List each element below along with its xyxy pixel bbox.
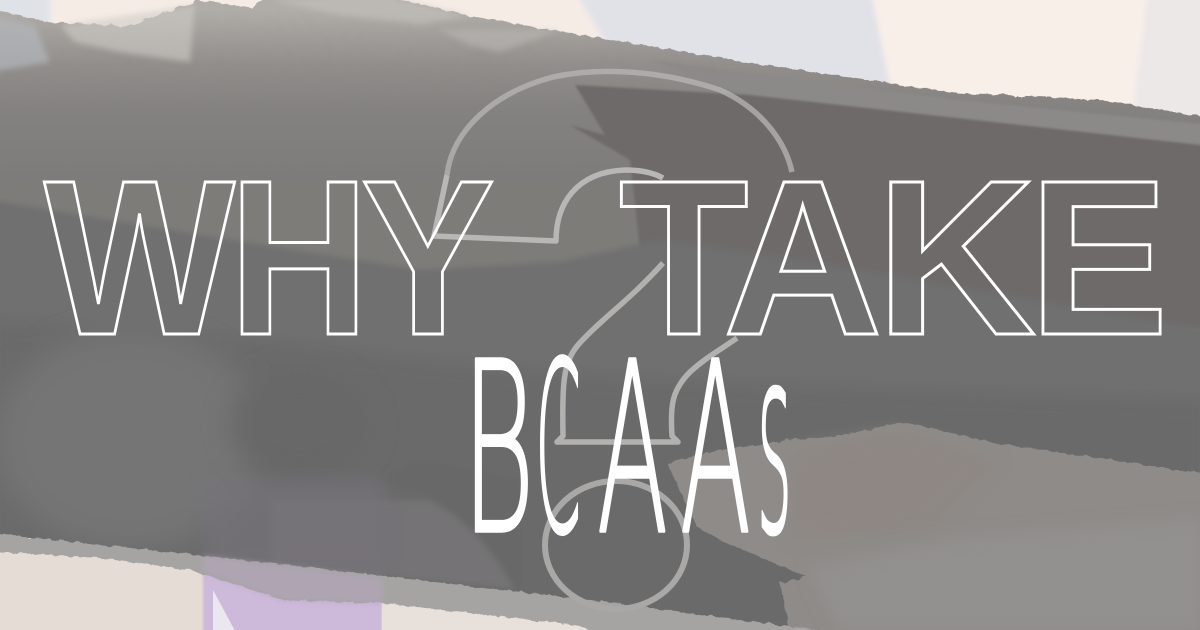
title: BCAAs: A — [680, 312, 751, 587]
band: darker lower section — [0, 202, 1200, 538]
question mark: left foot and inner hook — [434, 170, 663, 241]
title: WHY TAKE: K — [876, 134, 1036, 381]
lower left blobs — [0, 330, 520, 590]
title: BCAAs: B — [462, 313, 535, 587]
title: WHY TAKE — [44, 134, 1168, 382]
title: WHY TAKE: E — [1029, 134, 1168, 381]
band: bottom right torn patch — [667, 422, 1200, 630]
bottom grey strip — [0, 533, 838, 630]
title: WHY TAKE: Y — [361, 134, 495, 381]
question mark: dot — [545, 481, 687, 609]
band: dark right area — [570, 85, 1200, 330]
band: right edge lighter strip — [893, 104, 1200, 144]
title: WHY TAKE: W — [44, 134, 235, 381]
title: BCAAs: C — [535, 312, 581, 587]
title: BCAAs: s — [757, 293, 792, 593]
title: WHY TAKE: A — [723, 134, 883, 381]
band: patch light lower — [810, 520, 1200, 630]
question mark: top arc — [447, 71, 792, 175]
band: dark strip — [0, 534, 32, 538]
title: BCAAs — [462, 293, 792, 593]
icon: question mark outline — [434, 71, 792, 609]
title: BCAAs: A — [597, 312, 668, 587]
band: translucent pale left patches — [0, 0, 560, 72]
title: WHY TAKE: T — [619, 134, 749, 381]
title: WHY TAKE: H — [229, 135, 369, 382]
question mark: stem — [557, 263, 737, 442]
